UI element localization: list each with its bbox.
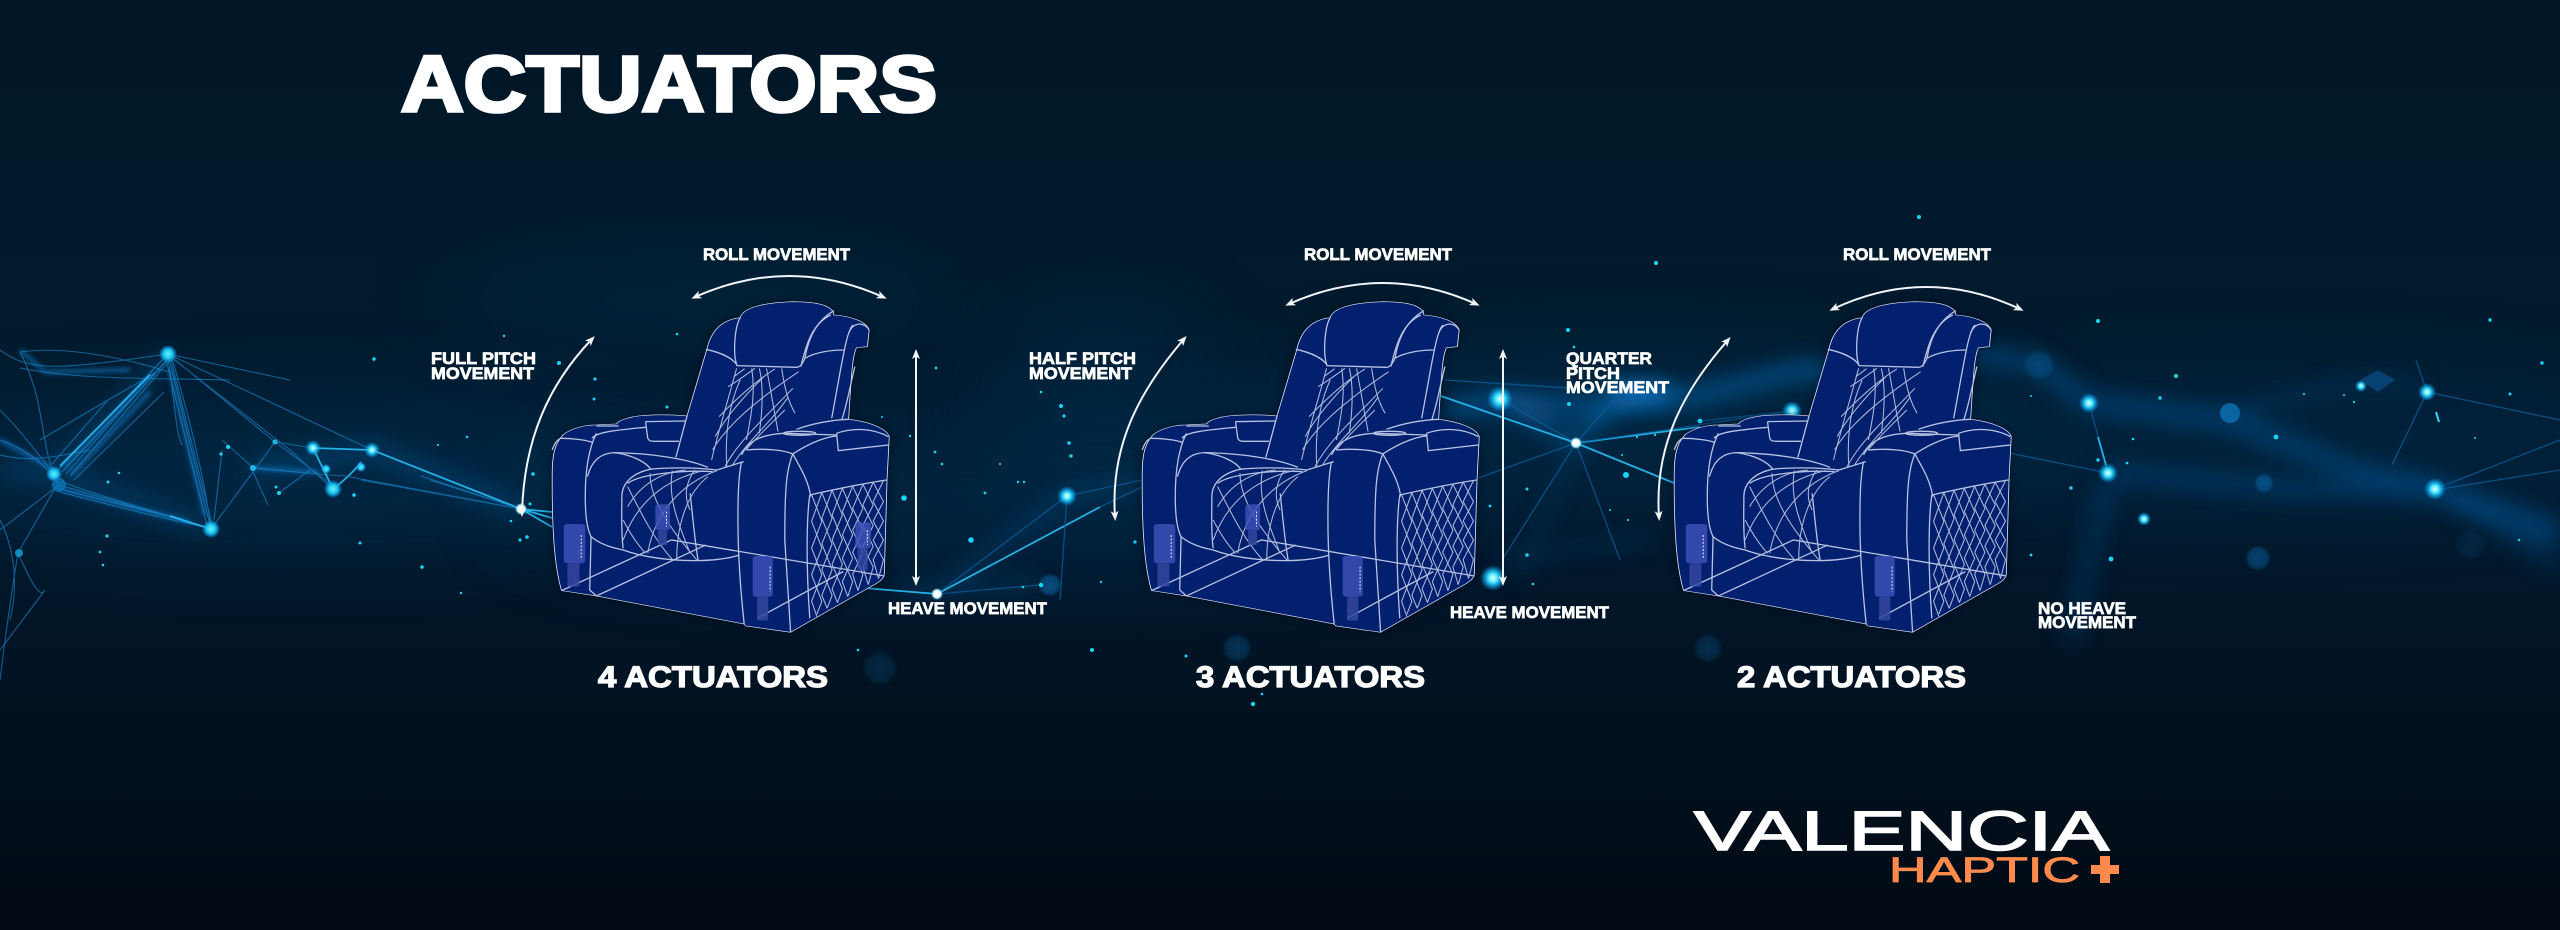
network: centre web	[862, 370, 1900, 686]
labels: chair 3 actuators	[1029, 245, 1610, 694]
arrow: pitch	[1114, 339, 1184, 517]
arrows: chair 3 actuators	[1114, 283, 1503, 582]
label: full pitch: FULL PITCH	[431, 349, 536, 368]
logo: haptic: HAPTIC	[1889, 851, 2080, 890]
network: right cluster	[1895, 349, 2560, 640]
label: quarter pitch line 2: PITCH	[1566, 364, 1620, 383]
label: full pitch line 2: MOVEMENT	[431, 364, 535, 383]
actuator: rear left	[1154, 524, 1175, 587]
node: full pitch junction	[515, 503, 527, 515]
logo: plus icon	[2091, 856, 2119, 883]
label: roll: ROLL MOVEMENT	[703, 245, 851, 264]
arrow: roll	[1833, 287, 2020, 309]
chair: 2 actuators	[1674, 302, 2011, 632]
actuator: front	[1343, 556, 1363, 621]
arrow: pitch	[522, 339, 592, 513]
label: no heave: NO HEAVE	[2038, 599, 2126, 618]
chair: 4 actuators	[552, 302, 889, 632]
actuator: mid	[1245, 504, 1260, 545]
label: heave: HEAVE MOVEMENT	[888, 599, 1048, 618]
actuator: right	[855, 522, 871, 570]
node: heave junction	[931, 588, 943, 600]
arrow: heave	[915, 353, 917, 582]
actuator: rear left	[564, 524, 585, 587]
arrow: pitch	[1658, 340, 1728, 517]
label: quarter pitch: QUARTER	[1566, 349, 1652, 368]
label: roll: ROLL MOVEMENT	[1843, 245, 1992, 264]
caption: 4 ACTUATORS	[598, 661, 828, 694]
network: left cluster	[0, 345, 552, 680]
label: roll: ROLL MOVEMENT	[1304, 245, 1453, 264]
labels: chair 4 actuators	[431, 245, 1048, 694]
labels: chair 2 actuators	[1566, 245, 2137, 694]
arrow: roll	[1289, 283, 1476, 304]
background glow bands	[0, 260, 2560, 570]
logo	[1694, 799, 2119, 890]
actuator: front	[753, 556, 773, 621]
caption: 2 ACTUATORS	[1737, 661, 1966, 694]
glow behind quarter pitch text	[1606, 383, 1674, 401]
actuator: front	[1875, 556, 1895, 621]
label: heave: HEAVE MOVEMENT	[1450, 603, 1610, 622]
logo: wordmark: VALENCIA	[1694, 799, 2110, 862]
arrows: chair 2 actuators	[1658, 287, 2020, 517]
label: half pitch: HALF PITCH	[1029, 349, 1136, 368]
chair: 3 actuators	[1142, 302, 1479, 632]
arrow: roll	[695, 276, 883, 297]
node: quarter pitch junction	[1570, 437, 1582, 449]
arrows: chair 4 actuators	[522, 276, 916, 582]
actuator: rear left	[1686, 524, 1707, 587]
arrow: heave	[1502, 353, 1504, 582]
title: ACTUATORS	[401, 39, 937, 128]
caption: 3 ACTUATORS	[1196, 661, 1425, 694]
label: quarter pitch line 3: MOVEMENT	[1566, 378, 1670, 397]
label: no heave line 2: MOVEMENT	[2038, 613, 2137, 632]
particles	[99, 215, 2544, 706]
actuator: mid	[655, 504, 670, 545]
label: half pitch line 2: MOVEMENT	[1029, 364, 1133, 383]
